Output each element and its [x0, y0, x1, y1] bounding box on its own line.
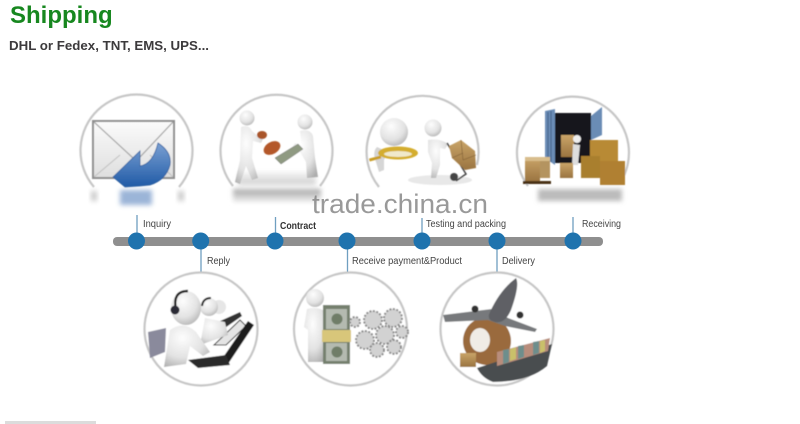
step labels: Receive payment&Product: [352, 256, 462, 267]
icon: figures with magnifier and hand truck: [367, 96, 479, 187]
stem connectors: [137, 215, 573, 272]
subtitle: carriers: DHL or Fedex, TNT, EMS, UPS...: [9, 38, 209, 53]
step labels: Receiving: [582, 219, 621, 230]
step labels: Contract: [280, 221, 317, 232]
watermark: trade.china.cn: [312, 189, 488, 219]
icon: two figures exchanging contract: [221, 95, 333, 202]
timeline nodes: [128, 232, 582, 250]
icon: call-centre operators: [144, 272, 258, 386]
step labels: Delivery: [502, 256, 535, 267]
timeline: [113, 215, 603, 272]
step labels: [143, 219, 621, 267]
title: Shipping: [10, 2, 113, 29]
timeline bar: [113, 237, 603, 246]
step labels: Reply: [207, 256, 230, 267]
bottom edge bar: [5, 421, 96, 424]
icon: shipping container with boxes: [517, 97, 629, 201]
icon: envelope with reply arrow (Inquiry): [80, 95, 192, 205]
step labels: Inquiry: [143, 219, 171, 230]
icon: plane, globe and cargo ship: [440, 272, 554, 386]
step labels: Testing and packing: [426, 219, 506, 230]
icon: figure with banknote and gears: [294, 272, 408, 386]
